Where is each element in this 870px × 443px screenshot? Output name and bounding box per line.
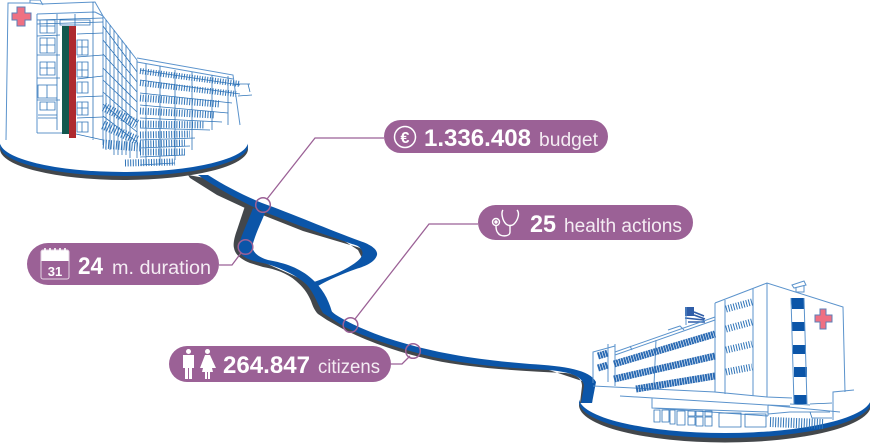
ground floor shops <box>654 403 832 427</box>
callout: health actions <box>478 205 693 240</box>
budget label: budget <box>539 130 599 151</box>
citizens label: citizens <box>318 357 380 378</box>
leader line: citizens <box>391 356 410 364</box>
platform: top building base <box>0 112 248 180</box>
road: blue lower branch <box>238 208 596 403</box>
marker: health actions <box>343 318 358 332</box>
ground floor hatching <box>770 422 823 424</box>
icon: calendar <box>41 248 69 279</box>
facade stripe green <box>62 26 69 134</box>
budget value: 1.336.408 <box>424 125 531 152</box>
health actions value: 25 <box>530 211 556 238</box>
tower and main outline <box>6 0 137 145</box>
road: blue upper branch <box>198 175 377 286</box>
side wing rows <box>140 64 252 165</box>
wing blue bands <box>598 334 715 389</box>
icon: euro: € <box>401 130 410 147</box>
callout: duration <box>27 243 219 285</box>
citizens value: 264.847 <box>223 352 310 379</box>
health actions label: health actions <box>564 216 682 237</box>
greek flag <box>685 307 705 325</box>
icon: stethoscope <box>492 210 518 236</box>
leader line: budget <box>267 138 384 199</box>
marker: citizens <box>406 344 420 358</box>
icon: man and woman <box>183 349 216 379</box>
leader line: duration <box>219 253 241 265</box>
building: bottom right hospital <box>593 281 854 427</box>
red cross <box>12 7 31 26</box>
red cross <box>815 309 832 329</box>
facade stripe red <box>69 26 76 138</box>
tower dark stripe <box>791 298 807 404</box>
road network <box>188 175 596 403</box>
ground floor lines <box>620 396 840 416</box>
callout: citizens <box>169 346 391 382</box>
icon: calendar: 31 <box>48 264 62 279</box>
side wing hatching <box>140 71 240 94</box>
marker: budget <box>256 198 270 212</box>
wing outline <box>593 317 715 392</box>
platform: bottom building base <box>579 363 870 442</box>
roof equipment <box>792 281 806 292</box>
side wing outline <box>137 58 240 125</box>
road: upper branch shadow <box>188 175 364 258</box>
tower outline <box>715 283 854 420</box>
front windows <box>37 2 103 140</box>
marker: duration <box>238 240 253 254</box>
road: lower branch shadow <box>234 206 594 403</box>
building: top left hospital <box>6 0 252 165</box>
callout: budget <box>384 120 608 153</box>
icon: euro <box>394 126 416 148</box>
duration value: 24 <box>78 253 104 280</box>
duration label: m. duration <box>112 258 211 279</box>
tower side windows <box>726 302 752 372</box>
stripe outline <box>791 298 807 404</box>
facade hatching <box>103 107 140 147</box>
receding facade <box>103 20 137 158</box>
leader line: health actions <box>355 224 478 319</box>
